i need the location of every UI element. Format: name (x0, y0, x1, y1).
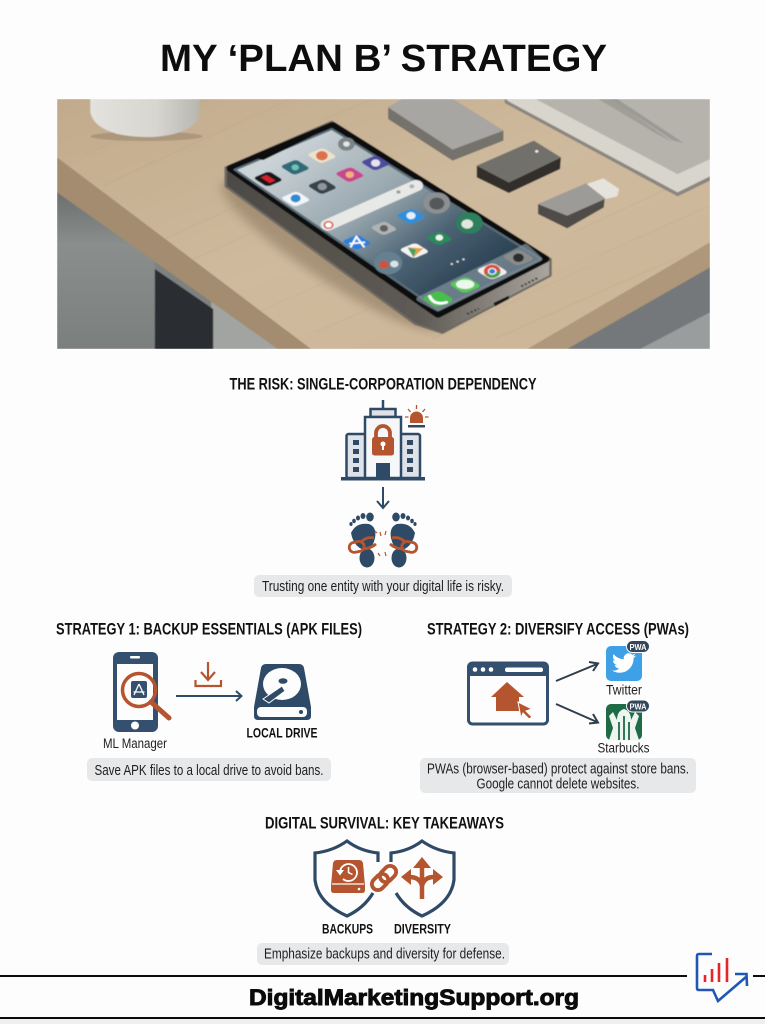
icon: diversity shield (391, 841, 454, 916)
footer site name: DigitalMarketingSupport.org (249, 985, 579, 1010)
heading: strategy 2: STRATEGY 2: DIVERSIFY ACCESS (PWAs) (427, 620, 689, 638)
icon: browser window with home and cursor (468, 663, 548, 724)
callout: trusting one entity (254, 575, 512, 597)
callout: pwas protect against store bans (420, 758, 696, 793)
label: ml manager: ML Manager (103, 736, 167, 751)
section: key takeaways (257, 814, 509, 965)
icon: footprints with broken chain (348, 512, 418, 568)
icon: phone with magnifier over app store icon (113, 652, 169, 732)
callout: save apk files (87, 758, 331, 781)
arrow: down (377, 487, 389, 508)
arrow: browser to starbucks (556, 704, 598, 724)
icon: linked shields for backups and diversity (315, 841, 454, 916)
callout: pwas protect against store bans: Google cannot delete websites. (476, 776, 640, 792)
label: starbucks: Starbucks (598, 740, 650, 756)
arrow: browser to twitter (556, 662, 598, 681)
icon: local hard drive (254, 664, 311, 720)
callout: emphasize backups and diversity: Emphasize backups and diversity for defense. (264, 946, 505, 962)
icon: corporate building with padlock and siren (341, 400, 428, 480)
callout: emphasize backups and diversity (257, 943, 509, 965)
callout: save apk files: Save APK files to a local drive to avoid bans. (94, 763, 324, 779)
arrow: phone to drive (176, 691, 242, 701)
photo: smartphone on a wooden desk (57, 99, 710, 349)
heading: key takeaways: DIGITAL SURVIVAL: KEY TAKEAWAYS (265, 814, 504, 832)
heading: the risk: THE RISK: SINGLE-CORPORATION DEPENDENCY (230, 374, 537, 394)
panel: strategy 1 (56, 620, 362, 781)
icon: starbucks app with PWA badge: PWA (630, 702, 647, 712)
icon: twitter app with PWA badge (606, 640, 650, 681)
section: the risk (230, 374, 537, 597)
icon: chain link (369, 863, 399, 893)
icon: starbucks app with PWA badge (606, 700, 650, 740)
icon: chart logo (697, 954, 747, 1001)
label: diversity: DIVERSITY (394, 922, 451, 936)
icon: twitter app with PWA badge: PWA (630, 643, 647, 652)
callout: trusting one entity: Trusting one entity with your digital life is risky. (262, 579, 504, 595)
icon: backups shield (315, 841, 378, 916)
label: local drive: LOCAL DRIVE (246, 726, 318, 740)
panel: strategy 2 (420, 620, 696, 793)
heading: strategy 1: STRATEGY 1: BACKUP ESSENTIALS (APK FILES) (56, 620, 362, 638)
footer (0, 954, 765, 1024)
callout: pwas protect against store bans: PWAs (browser-based) protect against store bans. (427, 762, 689, 778)
label: twitter: Twitter (606, 682, 642, 698)
icon: download to tray (196, 662, 221, 686)
title: MY ‘PLAN B’ STRATEGY (160, 38, 607, 80)
label: backups: BACKUPS (322, 922, 373, 936)
